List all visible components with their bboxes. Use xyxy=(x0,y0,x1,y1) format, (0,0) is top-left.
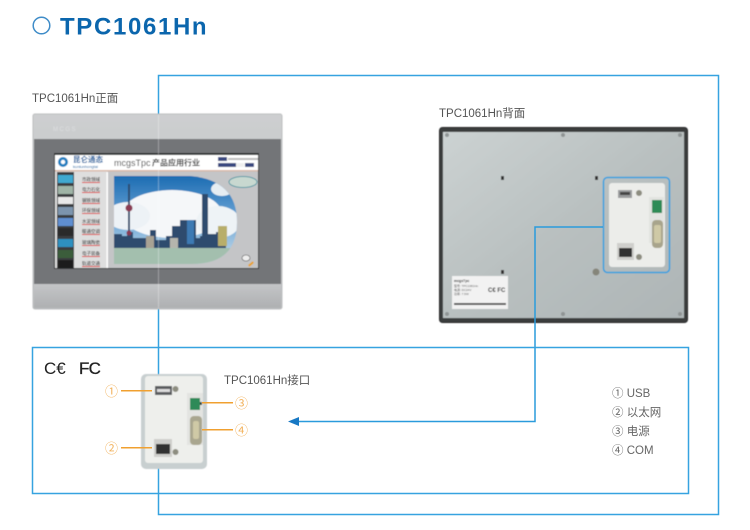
logo xyxy=(58,157,68,167)
screen: 产品应用行业 xyxy=(152,158,200,168)
rating label xyxy=(452,276,508,309)
photo: interface closeup xyxy=(141,374,207,469)
skyline photo xyxy=(106,176,240,265)
menu labels: 环保领域 xyxy=(82,207,100,214)
menu labels: 钢铁领域 xyxy=(82,197,100,204)
rating label: 型号: TPC1061Hn xyxy=(454,283,479,288)
menu labels: 电子装备 xyxy=(82,250,100,257)
label: front view: TPC1061Hn正面 xyxy=(32,93,118,105)
callout 4: ④ xyxy=(235,423,248,438)
connector line with arrow xyxy=(288,227,603,426)
rating label: mcgsTpc xyxy=(454,279,469,283)
menu labels: 玻璃陶瓷 xyxy=(82,239,100,246)
callout 2 xyxy=(105,441,152,456)
screen xyxy=(54,153,259,269)
faint line through the panel xyxy=(158,115,159,308)
photo: back of panel xyxy=(440,128,688,322)
highlight outline around interfaces xyxy=(604,178,670,272)
USB port xyxy=(155,386,172,395)
legend xyxy=(612,387,661,457)
COM port xyxy=(190,416,202,445)
rating label: 电源: DC24V xyxy=(454,287,471,292)
FCC mark: FC xyxy=(79,359,101,378)
rating label: C€ FC xyxy=(488,288,506,294)
screen: kunlunhongtai xyxy=(73,164,98,169)
photo: front of panel xyxy=(33,114,282,309)
label: interface: TPC1061Hn接口 xyxy=(224,374,310,387)
legend: ② 以太网 xyxy=(612,406,661,419)
callout 1: ① xyxy=(105,384,118,399)
legend: ③ 电源 xyxy=(612,424,650,438)
callout 2: ② xyxy=(105,441,118,456)
callout 1 xyxy=(105,384,152,399)
callout 4 xyxy=(202,423,248,438)
title: TPC1061Hn xyxy=(60,14,208,40)
ethernet port xyxy=(154,439,172,457)
menu labels xyxy=(82,176,100,267)
callout 3: ③ xyxy=(235,396,248,411)
power and COM block xyxy=(187,393,203,445)
label: back view: TPC1061Hn背面 xyxy=(439,106,525,120)
legend: ④ COM xyxy=(612,444,654,457)
interface plate xyxy=(609,183,665,267)
menu labels: 市政领域 xyxy=(82,176,100,183)
callout 3 xyxy=(202,396,248,411)
menu labels: 水泥领域 xyxy=(82,218,100,225)
photo: front of panel: MCGS xyxy=(53,127,77,133)
screen: 昆仑通态 xyxy=(73,154,103,164)
menu labels: 暖通空调 xyxy=(82,228,100,235)
menu thumbnails xyxy=(58,175,73,268)
menu labels: 电力石化 xyxy=(82,186,100,193)
rating label: 功率: 7.5W xyxy=(454,291,469,296)
power connector xyxy=(190,398,200,410)
legend: ① USB xyxy=(612,387,651,400)
interface panel frame xyxy=(32,348,688,494)
certification marks: C€ xyxy=(44,359,66,378)
menu labels: 轨道交通 xyxy=(82,260,100,267)
connector frame: large outer blue outline xyxy=(158,76,718,514)
screen: mcgsTpc xyxy=(114,158,151,168)
